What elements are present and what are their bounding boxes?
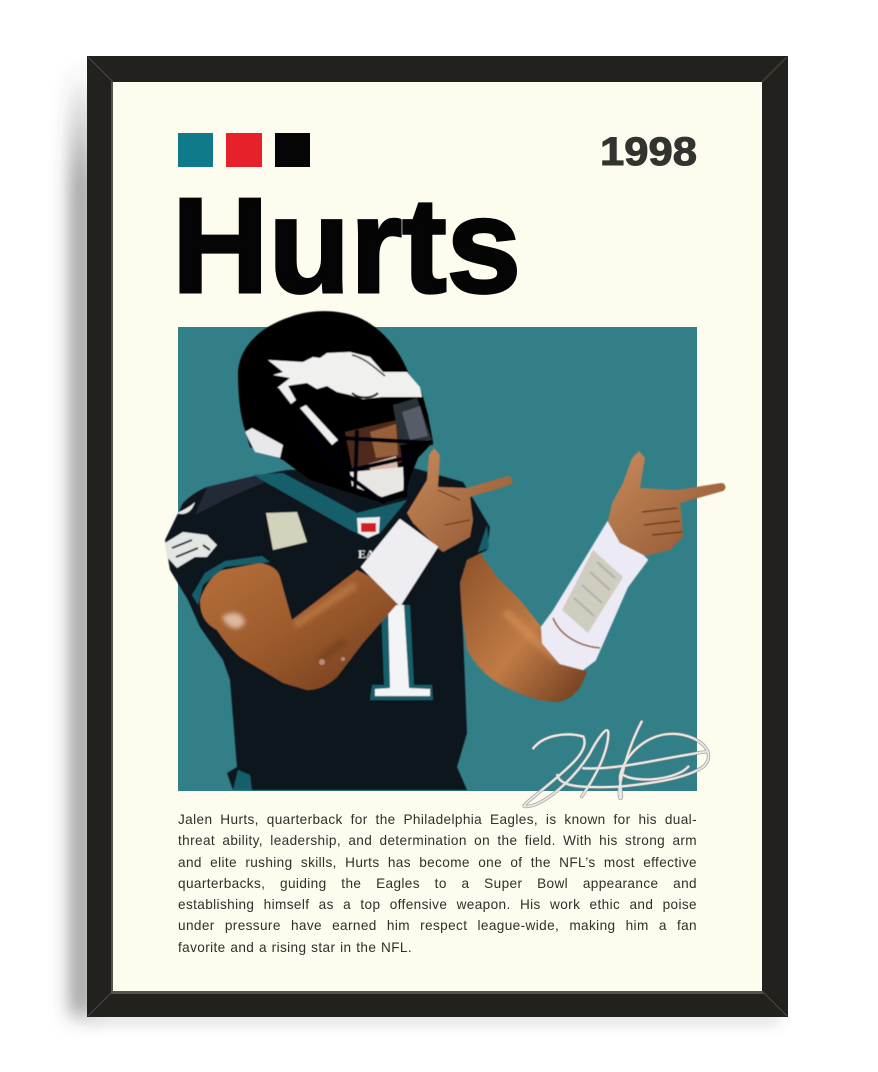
biography text: and elite rushing skills, Hurts has become one of the NFL’s most effective [178,855,697,870]
biography text: Jalen Hurts, quarterback for the Philadelphia Eagles, is known for his dual- [178,812,697,827]
NFL shield [357,517,380,538]
number 1 [370,605,433,700]
right sleeve hem [478,525,489,552]
jersey wordmark: EA [358,547,375,561]
year: 1998 [600,130,697,174]
chin strap [350,467,404,497]
frame shadow [72,66,780,1024]
title: Hurts [172,170,521,321]
signature [524,722,709,807]
colour swatches [178,133,310,167]
face [345,420,402,470]
jaw pad [245,428,283,458]
collar [253,473,407,538]
biography text: quarterbacks, guiding the Eagles to a Super Bowl appearance and [178,876,697,891]
black poster frame [87,56,788,1017]
wing decal [268,352,422,399]
visor [393,398,432,445]
wristband [362,520,437,605]
player photo [165,311,725,790]
left hand pointing [407,448,512,552]
biography text: under pressure have earned him respect league-wide, making him a fan [178,918,697,933]
jersey [165,467,490,790]
white helmet stripes [278,384,338,445]
biography text: threat ability, leadership, and determination on the field. With his strong arm [178,833,697,848]
biography text: establishing himself as a top offensive weapon. His work ethic and poise [178,897,697,912]
facemask bars [300,420,433,503]
left arm [192,556,398,690]
sleeve swoosh [176,502,195,514]
poster paper [113,82,762,991]
right arm [460,548,587,702]
forearm sleeve [542,522,647,669]
teal photo panel [178,327,697,791]
biography text [178,812,697,955]
jersey bottom trim [233,770,252,790]
salute patch [266,512,307,550]
helmet [238,311,433,503]
right hand [608,451,725,556]
sleeve eagle logo [165,532,217,568]
biography text: favorite and a rising star in the NFL. [178,940,412,955]
